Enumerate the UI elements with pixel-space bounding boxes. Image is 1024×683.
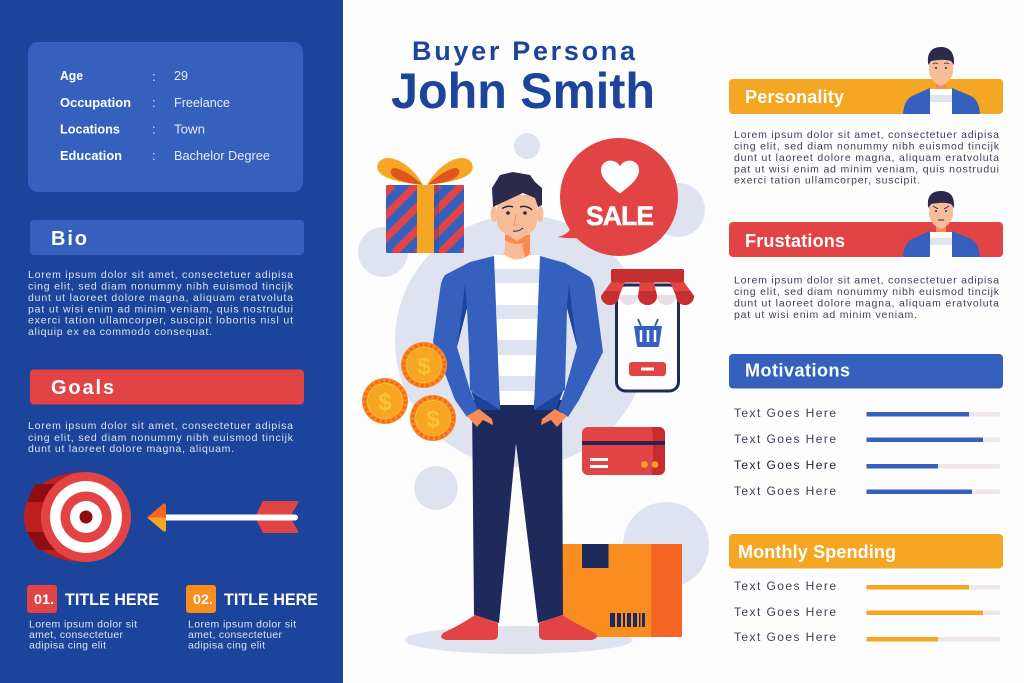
bar chart: motivations [734, 406, 1000, 498]
item 02: amet, consectetuer [188, 629, 282, 641]
striped shirt [494, 255, 540, 405]
icon: sale speech bubble: SALE [586, 201, 654, 231]
panel: left sidebar [0, 0, 343, 683]
bar chart: monthly spending: Text Goes Here [734, 605, 836, 619]
icon: coins: $ [426, 406, 440, 433]
text block: frustrations: pat ut wisi enim ad minim veniam. [734, 309, 917, 321]
bar chart: monthly spending: Text Goes Here [734, 579, 836, 593]
heading: Monthly Spending: Monthly Spending [738, 542, 896, 562]
profile card: : [152, 69, 156, 84]
icon: coins: $ [417, 353, 431, 380]
title: Buyer Persona [412, 36, 636, 66]
profile card: Freelance [174, 95, 230, 110]
profile card: Bachelor Degree [174, 148, 270, 163]
icon: coins [362, 342, 456, 441]
text block: bio: Lorem ipsum dolor sit amet, consectetuer adipisa [28, 269, 293, 281]
text block: frustrations [734, 274, 1000, 321]
trousers [472, 400, 563, 623]
text block: bio [28, 269, 294, 338]
figure: John Smith [433, 172, 603, 640]
bar chart: monthly spending [734, 579, 1000, 644]
heading: Bio: Bio [51, 228, 87, 250]
title: John Smith [391, 63, 655, 119]
text block: personality: pat ut wisi enim ad minim veniam, quis nostrudui [734, 163, 999, 175]
icon: arrow [147, 501, 298, 533]
icon: gift box [377, 158, 473, 253]
panel: personality [729, 47, 1003, 114]
head [490, 172, 544, 241]
bar chart: motivations: Text Goes Here [734, 432, 836, 446]
text block: bio: aliquip ex ea commodo consequat. [28, 326, 212, 338]
item 02: 02. [193, 591, 213, 607]
item 01: TITLE HERE [65, 590, 159, 609]
heading: Goals: Goals [51, 377, 114, 399]
neck [500, 225, 534, 262]
profile card: : [152, 95, 156, 110]
panel: personality: Personality [745, 87, 844, 107]
profile card: Occupation [60, 95, 131, 110]
text block: personality: dunt ut laoreet dolore magna, aliquam eratvoluta [734, 152, 999, 164]
shoes [441, 615, 597, 640]
profile card: Age [60, 68, 83, 83]
item 01: adipisa cing elit [29, 640, 106, 652]
profile card: Education [60, 148, 122, 163]
icon: parcel box [562, 544, 682, 637]
panel: frustrations [729, 191, 1003, 257]
item 02: adipisa cing elit [188, 640, 265, 652]
panel: frustrations: Frustations [745, 231, 845, 251]
icon: sale speech bubble [558, 138, 678, 256]
title [391, 36, 655, 119]
icon: coins: $ [378, 389, 392, 416]
heading: Motivations [729, 354, 1003, 388]
item 02: Lorem ipsum dolor sit [188, 618, 296, 630]
text block: personality: exerci tation ullamcorper, suscipit. [734, 175, 920, 187]
background circles [358, 133, 709, 654]
item 02: TITLE HERE [224, 590, 318, 609]
icon: target [24, 472, 131, 562]
text block: bio: pat ut wisi enim ad minim veniam, quis nostrudui [28, 303, 293, 315]
heading: Motivations: Motivations [745, 361, 850, 381]
item 02 [186, 585, 318, 652]
text block: bio: dunt ut laoreet dolore magna, aliquam eratvoluta [28, 292, 293, 304]
heading: Goals [30, 370, 304, 404]
bar chart: motivations: Text Goes Here [734, 458, 836, 472]
profile card: Locations [60, 122, 120, 136]
text block: goals: dunt ut laoreet dolore magna, aliquam. [28, 443, 234, 455]
text block: frustrations: cing elit, sed diam nonummy nibh euismod tincijk [734, 286, 1000, 298]
text block: goals: Lorem ipsum dolor sit amet, consectetuer adipisa [28, 420, 293, 432]
icon: credit card [582, 427, 665, 475]
item 01: Lorem ipsum dolor sit [29, 618, 137, 630]
bar chart: motivations: Text Goes Here [734, 406, 836, 420]
text block: goals: cing elit, sed diam nonummy nibh euismod tincijk [28, 432, 294, 444]
bar chart: monthly spending: Text Goes Here [734, 630, 836, 644]
text block: frustrations: dunt ut laoreet dolore magna, aliquam eratvoluta [734, 298, 999, 310]
icon: persona bust, neutral [903, 47, 980, 114]
text block: frustrations: Lorem ipsum dolor sit amet, consectetuer adipisa [734, 274, 999, 286]
bar chart: motivations: Text Goes Here [734, 484, 836, 498]
icon: shopping phone [601, 269, 694, 391]
heading: Monthly Spending [729, 534, 1003, 568]
item 01: 01. [34, 591, 54, 607]
text block: goals [28, 420, 294, 455]
text block: bio: exerci tation ullamcorper, suscipit lobortis nisl ut [28, 315, 293, 327]
text block: personality [734, 129, 1000, 187]
text block: personality: Lorem ipsum dolor sit amet, consectetuer adipisa [734, 129, 999, 141]
profile card: : [152, 122, 156, 136]
hands [467, 409, 567, 427]
text block: bio: cing elit, sed diam nonummy nibh euismod tincijk [28, 280, 294, 292]
profile card: : [152, 148, 156, 163]
heading: Bio [30, 220, 304, 255]
item 01 [27, 585, 159, 652]
icon: persona bust, frowning [903, 191, 980, 257]
item 01: amet, consectetuer [29, 629, 124, 641]
jacket [433, 256, 603, 417]
text block: personality: cing elit, sed diam nonummy nibh euismod tincijk [734, 140, 1000, 152]
profile card: 29 [174, 68, 188, 83]
profile card: Town [174, 122, 205, 136]
profile card [28, 42, 303, 192]
